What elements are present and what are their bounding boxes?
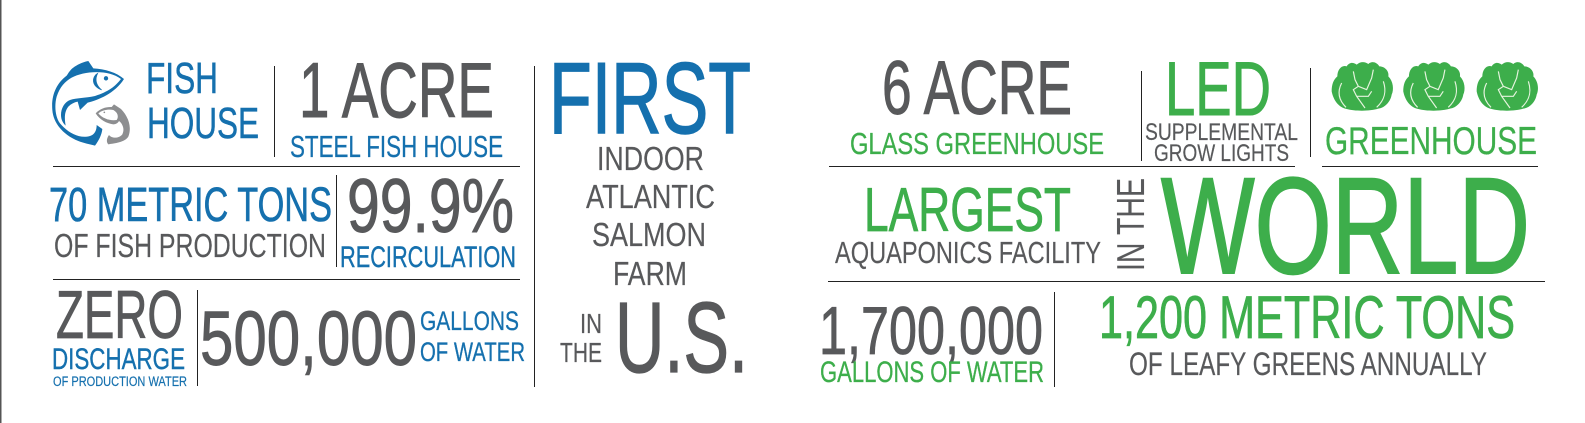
stat: zero discharge: DISCHARGE	[52, 343, 185, 376]
stat: 1,200 metric tons	[1099, 284, 1515, 382]
center heading: first indoor atlantic salmon farm in the U.S.	[549, 43, 751, 394]
center heading: first indoor atlantic salmon farm in the U.S.: U.S.	[615, 282, 748, 394]
heading: fish house: HOUSE	[147, 100, 259, 148]
stat: 99.9% recirculation: 99.9%	[347, 164, 514, 249]
stat: 6 acre glass greenhouse: GLASS GREENHOUSE	[850, 126, 1104, 161]
stat: 70 metric tons	[49, 179, 332, 264]
center heading: first indoor atlantic salmon farm in the U.S.: ATLANTIC	[586, 178, 715, 215]
stat: 1,700,000 gallons of water	[819, 293, 1044, 389]
center heading: first indoor atlantic salmon farm in the U.S.: SALMON	[592, 216, 706, 253]
heading: fish house: FISH	[146, 55, 218, 103]
stat: zero discharge: OF PRODUCTION WATER	[53, 374, 187, 389]
stat: 1,700,000 gallons of water: GALLONS OF WATER	[820, 356, 1044, 389]
stat: 6 acre glass greenhouse: 6 ACRE	[882, 46, 1072, 131]
center heading: first indoor atlantic salmon farm in the U.S.: THE	[560, 337, 602, 368]
stat: 99.9% recirculation	[340, 164, 516, 274]
icon: lettuce	[1332, 62, 1393, 111]
stat: zero discharge	[52, 277, 187, 389]
stat: largest aquaponics facility: AQUAPONICS FACILITY	[835, 235, 1101, 270]
stat: 6 acre glass greenhouse	[850, 46, 1104, 161]
stat: 99.9% recirculation: RECIRCULATION	[340, 241, 516, 274]
stat: LED grow lights	[1145, 47, 1298, 167]
stat: zero discharge: ZERO	[56, 277, 183, 353]
stat: LED grow lights: SUPPLEMENTAL	[1145, 119, 1298, 146]
stat: 70 metric tons: OF FISH PRODUCTION	[54, 227, 326, 264]
center heading: first indoor atlantic salmon farm in the U.S.: FIRST	[549, 43, 751, 155]
stat: 1,700,000 gallons of water: 1,700,000	[819, 293, 1043, 369]
center heading: first indoor atlantic salmon farm in the U.S.: INDOOR	[597, 140, 704, 177]
icon: fish	[52, 61, 130, 146]
rotated text: in the: IN THE	[1110, 178, 1153, 271]
stat: 500,000 gallons: OF WATER	[420, 337, 525, 367]
stat: 500,000 gallons: 500,000	[200, 296, 417, 382]
icon: lettuce	[1477, 62, 1538, 111]
stat: largest aquaponics facility	[835, 176, 1101, 270]
stat: LED grow lights: GROW LIGHTS	[1154, 140, 1289, 167]
stat: LED grow lights: LED	[1165, 47, 1271, 132]
icon: lettuce	[1403, 62, 1465, 111]
stat: 1 acre steel fish house	[290, 46, 503, 164]
center heading: first indoor atlantic salmon farm in the U.S.: FARM	[613, 255, 687, 292]
stat: 70 metric tons: 70 METRIC TONS	[49, 179, 332, 232]
heading: fish house	[146, 55, 259, 148]
stat: 500,000 gallons: GALLONS	[420, 306, 519, 336]
stat: 1 acre steel fish house: STEEL FISH HOUSE	[290, 129, 503, 164]
stat: 1 acre steel fish house: 1 ACRE	[299, 46, 494, 134]
center heading: first indoor atlantic salmon farm in the U.S.: IN	[580, 308, 602, 339]
stat: largest aquaponics facility: LARGEST	[864, 176, 1071, 245]
